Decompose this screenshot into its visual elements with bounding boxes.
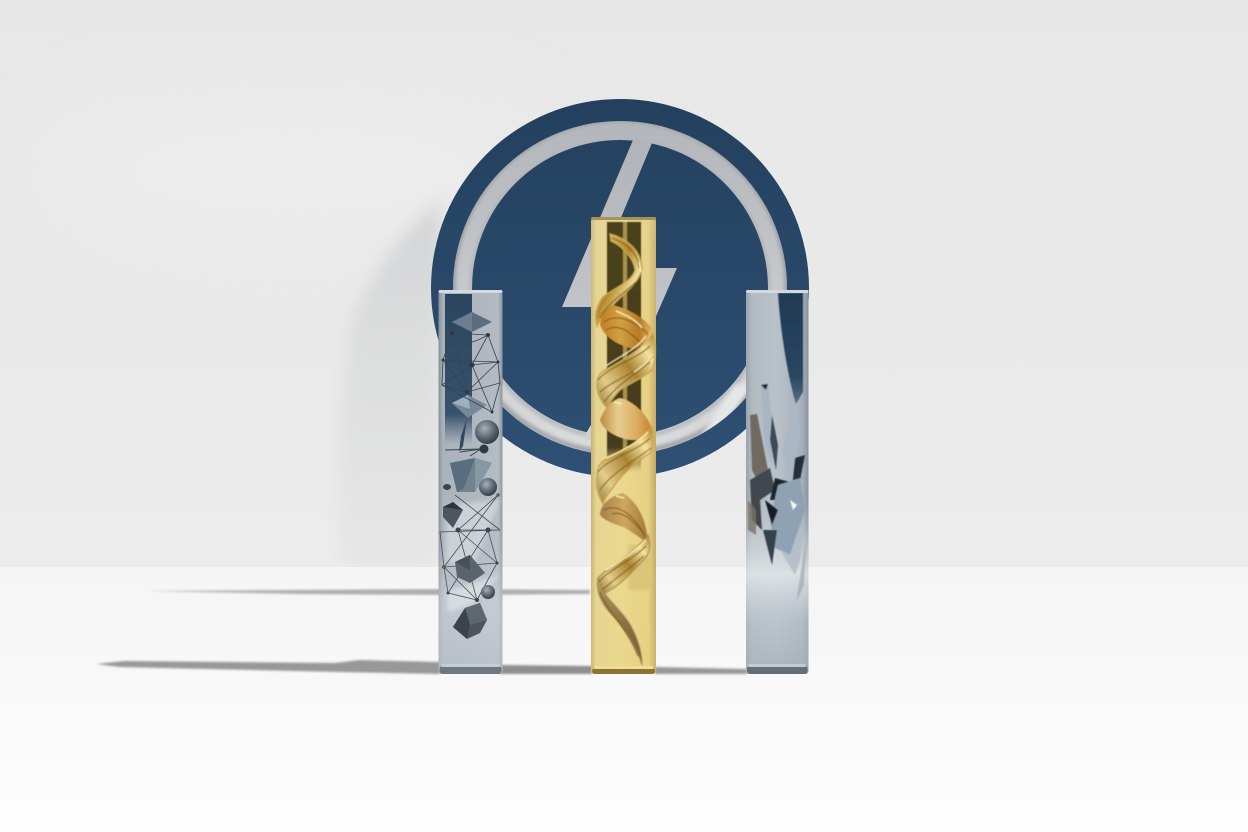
helix pocket 2 [600, 398, 652, 440]
sphere middle [479, 478, 497, 496]
helix ribbon [596, 234, 655, 665]
gold tube reflection block [628, 545, 650, 590]
left tube body [438, 291, 502, 674]
helix band 2 [597, 333, 655, 408]
helix band 3 [596, 427, 653, 504]
gold tube rim top [591, 217, 656, 220]
helix dark stripes [598, 238, 653, 656]
polyhedron middle [450, 458, 492, 492]
dark polyhedron [443, 502, 463, 528]
far floor shadow [145, 589, 590, 595]
near floor shadow [96, 660, 747, 674]
right tube body [746, 291, 808, 674]
polyhedron upper [452, 395, 487, 418]
tube: silver with geometric shapes [438, 290, 502, 674]
crystal cluster [748, 384, 806, 600]
wall background [0, 0, 1248, 567]
floor [0, 567, 1248, 832]
right tube dark reflection [778, 293, 803, 404]
emblem: circular bolt logo [431, 99, 809, 477]
helix pocket 1 [600, 305, 652, 349]
helix band 4 [598, 535, 650, 594]
gold tube dark reflection [607, 222, 641, 520]
helix tail [597, 578, 642, 665]
left tube lower sheen [438, 291, 502, 674]
wall light wash [60, 100, 540, 240]
ring inner shading [453, 119, 787, 453]
helix pocket 3 [600, 493, 648, 543]
wire network upper [442, 331, 500, 414]
tiny sphere [443, 484, 451, 490]
diamond top [452, 312, 492, 332]
gold tube body [591, 218, 656, 674]
left tube dark reflection [445, 294, 472, 444]
sphere lower [481, 585, 495, 599]
left tube bottom rim [440, 666, 502, 674]
wire network lower [440, 493, 500, 602]
emblem cut-out ring [462, 130, 778, 446]
sphere large [475, 420, 499, 444]
left tube pale patches [446, 500, 500, 612]
right tube sheen [746, 291, 808, 674]
tube: silver with crystal cluster [746, 290, 808, 674]
gold tube rim bottom [592, 668, 655, 674]
dark slab in tube [459, 418, 467, 452]
emblem cast shadow on wall [338, 192, 452, 567]
tube: gold with helix [591, 217, 656, 674]
helix bright stripes [606, 262, 652, 570]
right tube bottom rim [747, 666, 808, 674]
gold tube vertical tone [591, 218, 656, 674]
helix tip and first band [596, 234, 642, 326]
emblem lightning bolt cut-out [562, 140, 677, 445]
emblem outer disc [431, 99, 809, 477]
sphere small [445, 444, 488, 456]
left tube top rim [438, 290, 502, 293]
polyhedron lower [455, 555, 485, 583]
right tube top rim [746, 290, 808, 293]
icosahedron [453, 603, 487, 639]
